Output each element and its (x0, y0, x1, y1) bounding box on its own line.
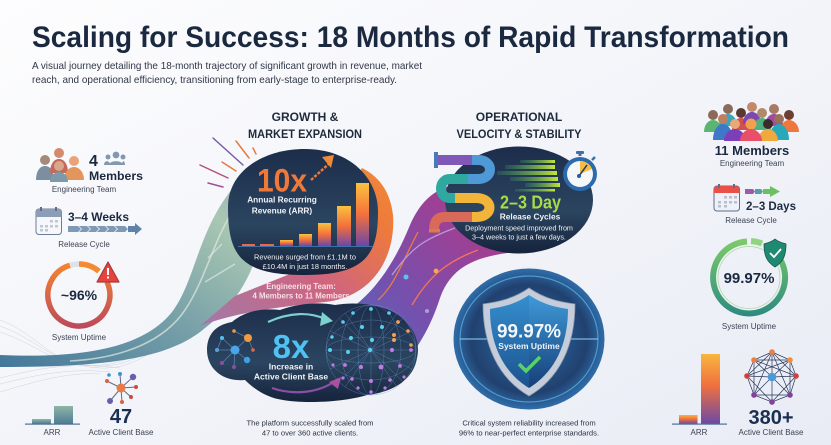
bars (25, 406, 80, 425)
left panel: uptime before (48, 262, 119, 342)
text: revenue surged: £10.4M in just 18 months. (263, 262, 347, 271)
label: System Uptime: System Uptime (52, 333, 107, 342)
caption: client base: 47 to over 360 active clients. (262, 428, 358, 438)
heading: growth and market expansion: GROWTH & (272, 110, 339, 124)
title: Scaling for Success: 18 Months of Rapid Transformation (32, 21, 789, 54)
flow ribbon: purple velocity (335, 182, 515, 378)
left panel: clients before (89, 372, 154, 437)
heading: operational velocity and stability (456, 110, 582, 141)
panel: release velocity (429, 146, 597, 254)
text: deployment speed: Deployment speed improved from (465, 224, 573, 232)
heading: growth and market expansion (248, 110, 362, 141)
label: Active Client Base: Active Client Base (89, 428, 154, 437)
panel: ARR growth (228, 149, 378, 275)
label: annual recurring revenue (247, 194, 317, 216)
label: increase in active client base: Active Client Base (254, 372, 328, 382)
value: 99.97%: 99.97% (724, 270, 774, 287)
value: 2-3 Days: 2–3 Days (746, 199, 796, 213)
value: Members: Members (89, 169, 143, 183)
label: Engineering Team: Engineering Team (52, 185, 117, 194)
value: ~96%: ~96% (61, 287, 98, 303)
icon: shield check (764, 239, 786, 267)
label: ARR: ARR (44, 428, 61, 437)
donut: 99.97 percent (713, 241, 785, 313)
text: revenue surged: Revenue surged from £1.1M to (254, 252, 356, 262)
icon: small network (105, 372, 138, 404)
right panel: engineering team after (704, 102, 799, 168)
value: 380+: 380+ (748, 407, 794, 429)
label: system uptime: System Uptime (498, 341, 560, 351)
panel background (207, 303, 418, 402)
text: engineering team growth: 4 Members to 11 Members (252, 292, 350, 300)
icon: mesh network (744, 349, 799, 405)
icon: check mark (519, 357, 540, 371)
icon: speed lines (497, 160, 560, 192)
right panel: clients after (739, 349, 804, 437)
text: deployment speed: 3–4 weeks to just a few days. (472, 232, 566, 242)
heading: operational velocity and stability: VELOCITY & STABILITY (456, 127, 582, 141)
icon: calendar (36, 207, 62, 234)
arrow: bottom (272, 377, 341, 392)
icon: small group (104, 152, 126, 165)
arrow: slow release (68, 223, 142, 235)
bar chart: ARR growth (238, 183, 373, 247)
caption: reliability: Critical system reliability increased from (462, 418, 596, 428)
bars (672, 354, 727, 425)
caption: reliability: 96% to near-perfect enterprise standards. (459, 428, 599, 438)
panel background (228, 149, 378, 275)
flow ribbon: teal growth (0, 172, 262, 367)
icon: pipes (429, 152, 490, 232)
value: 3-4 Weeks: 3–4 Weeks (68, 210, 129, 224)
text: revenue surged (254, 252, 356, 271)
label: increase in active client base (254, 362, 328, 382)
caption: client base: The platform successfully scaled from (246, 418, 374, 428)
heading: growth and market expansion: MARKET EXPANSION (248, 127, 362, 141)
arrow: top (268, 312, 333, 326)
label: release cycles: Release Cycles (500, 212, 561, 222)
value: 11 Members: 11 Members (715, 143, 789, 158)
subtitle (32, 61, 422, 86)
right panel: release cycle after (714, 184, 796, 225)
label: Release Cycle: Release Cycle (58, 240, 110, 249)
icon: warning triangle (97, 262, 119, 282)
label: annual recurring revenue: Revenue (ARR) (252, 206, 312, 216)
caption: reliability (459, 418, 599, 438)
icon: calendar (714, 184, 740, 211)
text: engineering team growth: Engineering Team: (266, 282, 336, 291)
panel: uptime shield (454, 268, 604, 410)
label: Release Cycle: Release Cycle (725, 216, 777, 225)
label: ARR: ARR (691, 428, 708, 437)
value: 2-3 Day: 2–3 Day (500, 192, 562, 212)
arrow: growth (311, 155, 334, 180)
value: 8x: 8x (273, 328, 310, 365)
label: Engineering Team: Engineering Team (720, 159, 785, 168)
heading: operational velocity and stability: OPERATIONAL (476, 110, 562, 124)
panel: client base growth (207, 303, 418, 402)
label: Active Client Base: Active Client Base (739, 428, 804, 437)
right panel: ARR after (672, 354, 727, 437)
label: annual recurring revenue: Annual Recurring (247, 194, 317, 204)
decorative burst icon (200, 138, 256, 187)
icon: small network (215, 329, 255, 369)
subtitle: reach, and operational efficiency, transitioning from early-stage to enterprise-ready. (32, 75, 397, 86)
value: 99.97%: 99.97% (497, 322, 561, 342)
icon: shield (483, 288, 575, 396)
icon: team of eleven (704, 102, 799, 141)
icon: stopwatch (563, 151, 597, 191)
caption: client base (246, 418, 374, 438)
left panel: engineering team before (36, 148, 143, 194)
value: 47: 47 (110, 406, 132, 428)
arrow: fast release (745, 186, 780, 197)
value: 10x: 10x (257, 162, 307, 198)
icon: network globe (326, 305, 416, 395)
right panel: uptime after (713, 239, 786, 331)
icon: team of four (36, 148, 84, 182)
value: 4: 4 (89, 153, 98, 170)
text: engineering team growth (252, 282, 350, 300)
orb (454, 268, 604, 410)
flow ribbon: pink and orange swoosh (200, 168, 393, 326)
left panel: ARR before (25, 406, 80, 437)
panel background (445, 146, 593, 254)
label: System Uptime: System Uptime (722, 322, 777, 331)
donut: 96 percent (48, 264, 110, 326)
left panel: release cycle before (36, 207, 142, 249)
text: deployment speed (465, 224, 573, 242)
label: increase in active client base: Increase in (269, 362, 313, 372)
subtitle: A visual journey detailing the 18-month trajectory of significant growth in revenue, market (32, 61, 422, 72)
